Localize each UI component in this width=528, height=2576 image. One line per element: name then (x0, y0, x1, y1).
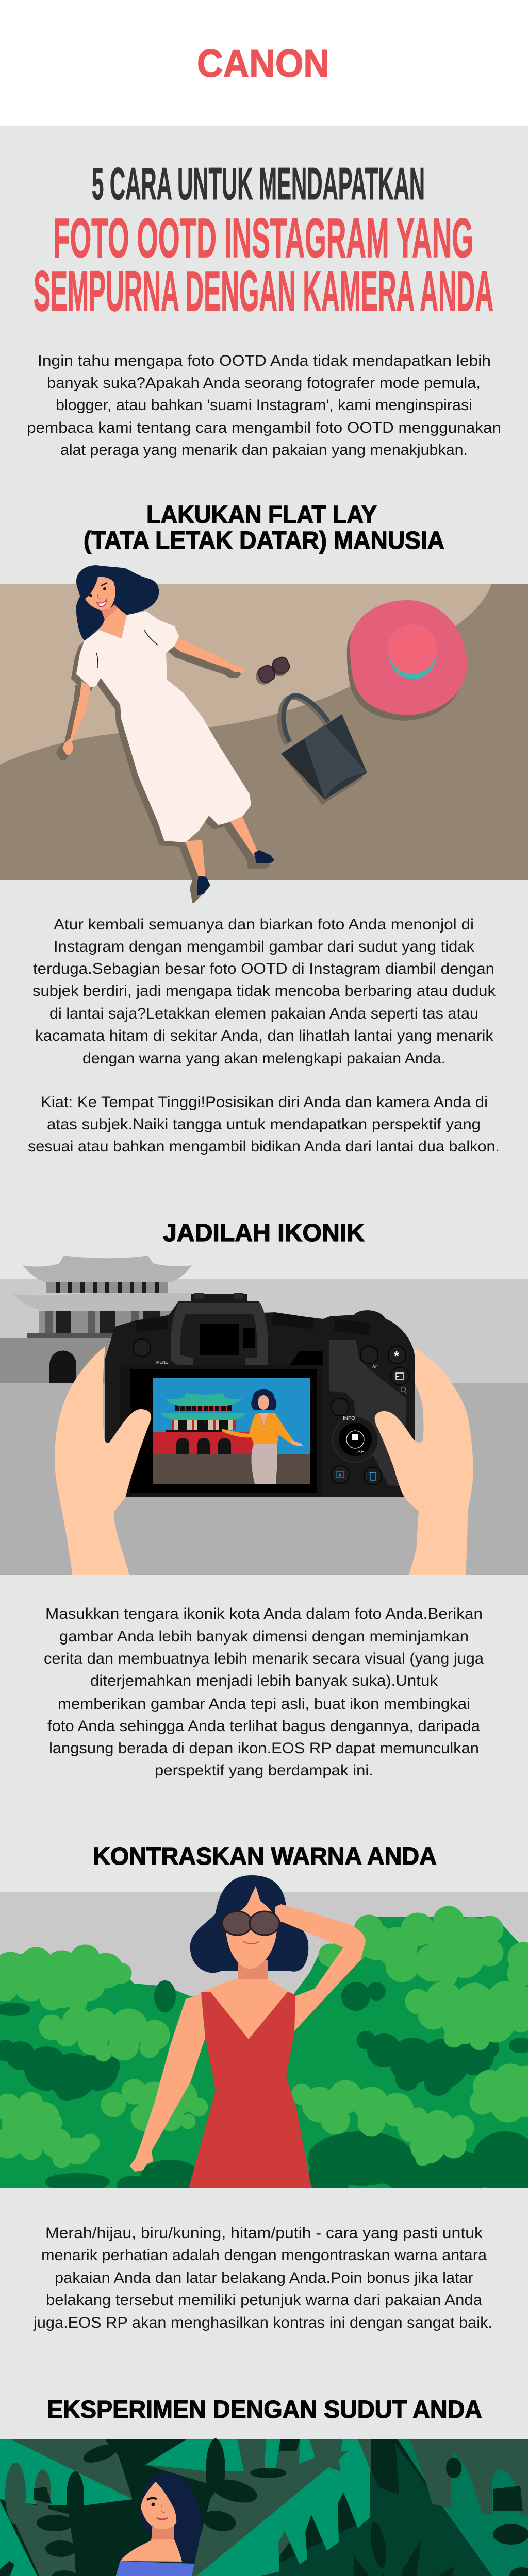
text block 1: Instagram dengan mengambil gambar dari sudut yang tidak (54, 938, 475, 955)
heading 4: EKSPERIMEN DENGAN SUDUT ANDA (47, 2396, 482, 2424)
text block 2: perspektif yang berdampak ini. (155, 1762, 373, 1779)
text block 2: memberikan gambar Anda tepi asli, buat ikon membingkai (58, 1696, 470, 1713)
woman lying on floor (62, 565, 274, 895)
text block 1: di lantai saja?Letakkan elemen pakaian Anda seperti tas atau (50, 1005, 478, 1022)
text block 2: langsung berada di depan ikon.EOS RP dapat memunculkan (49, 1740, 479, 1757)
intro text: banyak suka?Apakah Anda seorang fotografer mode pemula, (47, 375, 481, 392)
camera dial (333, 1417, 378, 1462)
heading 3: KONTRASKAN WARNA ANDA (93, 1843, 437, 1870)
woman in blue dress (86, 2472, 238, 2576)
text block 1: kacamata hitam di sekitar Anda, dan lihatlah lantai yang menarik (35, 1027, 494, 1044)
camera labels: SET (357, 1449, 367, 1455)
panel: contrast colours with bushes (0, 1875, 528, 2195)
leaves top centre (145, 2438, 371, 2502)
camera labels: MENU (156, 1360, 169, 1365)
text block 2: gambar Anda lebih banyak dimensi dengan meminjamkan (59, 1628, 469, 1645)
text block 3: belakang tersebut memiliki petunjuk warna dari pakaian Anda (46, 2292, 482, 2309)
panel: flat lay illustration (0, 565, 528, 902)
camera labels (156, 1348, 400, 1455)
panel: experiment with angles (0, 2438, 528, 2576)
text block 3: pakaian Anda dan latar belakang Anda.Poin bonus jika latar (55, 2269, 473, 2286)
text block 1: subjek berdiri, jadi mengapa tidak mencoba berbaring atau duduk (32, 982, 496, 999)
text block 3 (33, 2225, 492, 2331)
text block 2: Masukkan tengara ikonik kota Anda dalam foto Anda.Berikan (45, 1605, 483, 1622)
text block 2: foto Anda sehingga Anda terlihat bagus dengannya, daripada (47, 1718, 480, 1735)
text block 2 (44, 1605, 484, 1779)
text block 3: juga.EOS RP akan menghasilkan kontras ini dengan sangat baik. (33, 2314, 492, 2331)
text block 1: Atur kembali semuanya dan biarkan foto Anda menonjol di (54, 916, 474, 933)
heading 2: JADILAH IKONIK (163, 1219, 365, 1247)
camera buttons (133, 1339, 408, 1485)
text block 1: terduga.Sebagian besar foto OOTD di Instagram diambil dengan (33, 960, 494, 977)
rear screen (120, 1365, 321, 1497)
intro text: alat peraga yang menarik dan pakaian yang menakjubkan. (60, 442, 468, 459)
sunglasses (256, 655, 291, 685)
shadow of woman (57, 617, 269, 902)
intro text: blogger, atau bahkan 'suami Instagram', kami menginspirasi (56, 397, 472, 414)
screen photo: woman at palace (153, 1378, 310, 1484)
leaves left (0, 2439, 133, 2576)
left hand (55, 1346, 151, 1575)
intro text (27, 352, 501, 459)
camera body (105, 1293, 415, 1497)
palace in background (0, 1256, 206, 1383)
text block 1: Kiat: Ke Tempat Tinggi!Posisikan diri Anda dan kamera Anda di (41, 1094, 488, 1111)
heading 1: (TATA LETAK DATAR) MANUSIA (84, 527, 444, 554)
title (34, 158, 493, 323)
right hand (375, 1347, 473, 1575)
woman in red dress (129, 1875, 366, 2188)
camera labels: AF (372, 1364, 378, 1369)
intro text: pembaca kami tentang cara mengambil foto OOTD menggunakan (27, 419, 501, 436)
heading 1: LAKUKAN FLAT LAY (146, 501, 377, 529)
hat (347, 600, 467, 721)
text block 3: Merah/hijau, biru/kuning, hitam/putih - cara yang pasti untuk (45, 2225, 483, 2242)
large plant right (191, 2439, 528, 2576)
icons on camera (337, 1373, 406, 1480)
camera labels: INFO (343, 1416, 355, 1421)
panel: iconic landmark with camera (0, 1256, 528, 1575)
intro text: Ingin tahu mengapa foto OOTD Anda tidak mendapatkan lebih (38, 352, 491, 369)
heading 1 (84, 501, 444, 554)
bushes (0, 1908, 528, 2195)
text block 1: dengan warna yang akan melengkapi pakaian Anda. (82, 1050, 446, 1067)
text block 1: sesuai atau bahkan mengambil bidikan Anda dari lantai dua balkon. (28, 1138, 500, 1155)
text block 2: cerita dan membuatnya lebih menarik secara visual (yang juga (44, 1650, 484, 1667)
logo: Canon: CANON (197, 42, 329, 85)
text block 1 (28, 916, 500, 1155)
handbag (279, 696, 367, 805)
text block 2: diterjemahkan menjadi lebih banyak suka).Untuk (90, 1672, 438, 1689)
camera labels: * (394, 1348, 400, 1364)
text block 3: menarik perhatian adalah dengan mengontraskan warna antara (41, 2247, 487, 2264)
text block 1: atas subjek.Naiki tangga untuk mendapatkan perspektif yang (47, 1116, 481, 1133)
viewfinder (171, 1303, 268, 1367)
